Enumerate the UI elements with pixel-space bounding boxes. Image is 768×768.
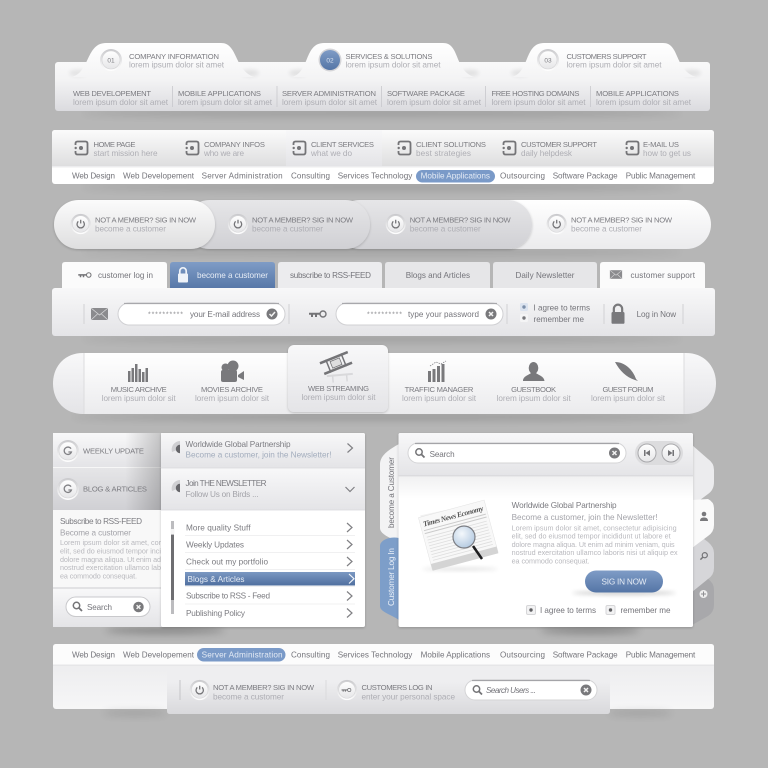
text block: subscribe: Become a customer: [60, 529, 131, 538]
customers log in: [337, 680, 455, 702]
item: movies archive: [195, 360, 270, 403]
item: traffic manager: [402, 361, 477, 403]
text block: newsletter: Worldwide Global Partnership: [512, 501, 617, 510]
icon: equalizer bars: [128, 364, 148, 382]
nav bar links: Web Developement: [123, 650, 195, 660]
email input: [118, 303, 285, 325]
tab: customer support: customer support: [630, 271, 696, 280]
text block: subscribe: dolore magna aliqua. Ut enim ad: [60, 555, 161, 564]
item: music archive: MUSIC ARCHIVE: [111, 385, 167, 394]
text block: newsletter: dolore magna aliqua. Ut enim ad minim veniam, quis: [512, 540, 675, 549]
sub menu columns: lorem ipsum dolor sit amet: [178, 98, 273, 107]
segment 2: [228, 214, 354, 234]
password input: type your password: [408, 310, 479, 319]
icon: person: [523, 362, 544, 381]
checkboxes: [520, 303, 590, 324]
customers log in: enter your personal space: [362, 692, 455, 702]
item: worldwide partnership: [172, 440, 352, 460]
previous and next buttons: [635, 441, 683, 465]
nav bar links: Web Developement: [123, 172, 195, 180]
illustration: newspaper with magnifier: [418, 498, 499, 571]
panel: newsletter sign-in card: [380, 433, 714, 634]
tab: customers support: 03: [544, 58, 552, 64]
search users field: [465, 680, 597, 700]
list of links: Publishing Policy: [186, 609, 246, 618]
icon: rising chart: [428, 364, 444, 382]
tab: blogs and articles: Blogs and Articles: [406, 271, 470, 280]
side tab: customer log in: Customer Log In: [387, 548, 396, 606]
nav bar links: [72, 648, 696, 662]
text block: newsletter: elit, sed do eiusmod tempor incididunt ut labore et: [512, 532, 671, 541]
panel: numbered tab navigation: [55, 43, 710, 117]
password input: [336, 303, 503, 325]
sign in prompt: NOT A MEMBER? SIG IN NOW: [213, 683, 315, 692]
customers log in: CUSTOMERS LOG IN: [362, 683, 432, 692]
tab: company information: COMPANY INFORMATION: [129, 52, 219, 61]
sub menu columns: SOFTWARE PACKAGE: [387, 89, 465, 98]
menu item: home page: HOME PAGE: [94, 140, 136, 149]
menu item: company infos: who we are: [203, 149, 244, 158]
tab: services and solutions: lorem ipsum dolor sit amet: [346, 60, 441, 70]
checkboxes: I agree to terms: [534, 304, 590, 312]
sub menu columns: WEB DEVELOPEMENT: [73, 89, 151, 98]
checkboxes: I agree to terms: [540, 606, 596, 615]
tab: services and solutions: 02: [326, 58, 334, 64]
text block: newsletter: ea commodo consequat.: [512, 556, 590, 566]
tab: company information: [72, 43, 254, 77]
item: worldwide partnership: Become a customer, join the Newsletter!: [186, 450, 332, 460]
menu item: company infos: COMPANY INFOS: [204, 140, 265, 149]
menu item: home page: start mission here: [94, 149, 158, 158]
nav bar links: Software Package: [553, 650, 618, 660]
sub menu columns: FREE HOSTING DOMAINS: [492, 89, 580, 98]
item: join newsletter: Follow Us on Birds ...: [186, 490, 258, 499]
tab: subscribe to RSS-FEED: subscribe to RSS-FEED: [290, 271, 371, 280]
item: web streaming: lorem ipsum dolor sit: [302, 393, 376, 402]
item: guestbook: [497, 362, 571, 403]
list of links: Subscribe to RSS - Feed: [186, 592, 270, 600]
segment 4: [547, 214, 673, 234]
tab: daily newsletter: [493, 262, 597, 290]
search field: Search: [87, 603, 112, 612]
item: traffic manager: TRAFFIC MANAGER: [405, 385, 474, 394]
item: music archive: [102, 364, 176, 403]
nav bar links: Server Administration: [202, 650, 283, 660]
list of links: [185, 523, 355, 618]
button: sign in now: SIG IN NOW: [602, 578, 647, 586]
nav bar links: Web Design: [72, 650, 115, 660]
sub menu columns: MOBILE APPLICATIONS: [596, 89, 679, 98]
sub menu columns: lorem ipsum dolor sit amet: [73, 98, 169, 107]
item: movies archive: lorem ipsum dolor sit: [195, 394, 270, 403]
list of links: More quality Stuff: [186, 524, 251, 532]
menu item: company infos: [186, 140, 265, 158]
tab: customer log in: customer log in: [98, 271, 153, 280]
item: join newsletter: [172, 479, 354, 499]
tab: customer support: [600, 262, 705, 290]
tab: subscribe to RSS-FEED: [278, 262, 382, 290]
segment 3: NOT A MEMBER? SIG IN NOW: [410, 216, 512, 225]
nav bar links: Consulting: [291, 172, 330, 180]
nav bar links: Services Technology: [338, 172, 413, 180]
menu item: e-mail us: how to get us: [643, 149, 691, 158]
icon: plus: [700, 590, 708, 598]
log in now: Log in Now: [637, 310, 676, 319]
segment 4: NOT A MEMBER? SIG IN NOW: [571, 216, 673, 225]
menu item: client services: CLIENT SERVICES: [311, 140, 374, 149]
nav bar links: Mobile Applications: [421, 172, 490, 180]
tab: company information: lorem ipsum dolor sit amet: [129, 60, 225, 70]
segment 3: become a customer: [410, 224, 481, 234]
scrollbar: [170, 521, 174, 614]
segment 1: NOT A MEMBER? SIG IN NOW: [95, 216, 197, 225]
item: guest forum: lorem ipsum dolor sit: [591, 394, 666, 403]
nav bar links: Public Management: [626, 172, 696, 180]
list of links: Check out my portfolio: [186, 558, 268, 566]
password input: **********: [367, 312, 402, 318]
sub menu columns: MOBILE APPLICATIONS: [178, 89, 261, 98]
item: web streaming: WEB STREAMING: [308, 384, 369, 393]
list of links: Weekly Updates: [186, 540, 244, 550]
search field: [408, 443, 626, 463]
panel: segmented pill sign-in bar: [54, 200, 711, 255]
text block: newsletter: nostrud exercitation ullamco laboris nisi ut aliquip ex: [512, 548, 678, 557]
text block: subscribe: nostrud exercitation ullamco lab: [60, 563, 161, 572]
tab: become a customer: become a customer: [197, 271, 268, 280]
panel: footer navigation: [53, 644, 714, 716]
nav bar links: [72, 170, 696, 182]
item: guestbook: lorem ipsum dolor sit: [497, 394, 571, 403]
text block: subscribe: ea commodo consequat.: [60, 572, 137, 580]
item: blog and articles: [57, 478, 147, 500]
search field: Search: [430, 450, 455, 459]
panel: accordion sidebar: [53, 433, 365, 634]
left accordion column: [53, 433, 163, 627]
icon: user: [700, 512, 708, 521]
menu item: e-mail us: E-MAIL US: [643, 140, 679, 149]
checkboxes: [526, 606, 671, 615]
sub menu columns: lorem ipsum dolor sit amet: [282, 98, 378, 107]
side tabs right: [692, 445, 714, 625]
menu item: e-mail us: [626, 140, 691, 158]
sign in prompt: become a customer: [213, 692, 284, 702]
nav bar links: Software Package: [553, 172, 618, 180]
text block: subscribe: Subscribe to RSS-FEED: [60, 517, 142, 526]
sub menu columns: lorem ipsum dolor sit amet: [492, 98, 586, 107]
side tab: become a customer: become a Customer: [387, 457, 396, 528]
menu item: customer support: daily helpdesk: [521, 149, 573, 158]
nav bar links: Server Administration: [202, 172, 283, 180]
item: movies archive: MOVIES ARCHIVE: [201, 385, 263, 394]
segment 4: become a customer: [571, 224, 642, 234]
item: guest forum: [591, 362, 666, 403]
item: traffic manager: lorem ipsum dolor sit: [402, 394, 477, 403]
tab: blogs and articles: [385, 262, 490, 290]
tab: services and solutions: [292, 43, 474, 77]
nav bar links: Mobile Applications: [421, 650, 490, 660]
text block: newsletter: [512, 501, 678, 566]
panel: login form with tabs: [52, 262, 715, 342]
item: music archive: lorem ipsum dolor sit: [102, 394, 176, 403]
nav bar links: Outsourcing: [500, 172, 545, 180]
search users field: Search Users ...: [486, 686, 536, 695]
button: sign in now: [572, 570, 676, 595]
menu item: client services: what we do: [310, 149, 352, 158]
side tab: become a customer: [380, 444, 399, 542]
text block: subscribe: [60, 517, 162, 580]
checkboxes: remember me: [620, 606, 671, 615]
text block: subscribe: elit, sed do eiusmod tempor inci: [60, 546, 161, 556]
segment 2: NOT A MEMBER? SIG IN NOW: [252, 216, 354, 225]
email input: **********: [148, 312, 183, 318]
icon: movie camera: [221, 360, 244, 382]
icon: feather: [615, 362, 638, 381]
right accordion column: [161, 433, 365, 627]
panel: icon menu with nav bar: [52, 130, 714, 191]
segment 3: [386, 214, 512, 234]
tab: customers support: [512, 43, 696, 77]
icon: film strip: [319, 351, 353, 375]
log in now: [612, 305, 676, 324]
item: weekly update: [57, 440, 144, 462]
menu item: client solutions: CLIENT SOLUTIONS: [416, 140, 486, 149]
sub menu columns: lorem ipsum dolor sit amet: [387, 98, 482, 107]
text block: newsletter: Lorem ipsum dolor sit amet, consectetur adipisicing: [512, 524, 677, 532]
tab: customers support: lorem ipsum dolor sit amet: [566, 60, 662, 70]
search field: [66, 597, 150, 616]
side tab: customer log in: [380, 537, 399, 620]
sign in prompt: [190, 680, 315, 702]
list of links: Blogs & Articles: [188, 575, 244, 584]
key icon: [309, 311, 326, 317]
illustration: newspaper with magnifier: Times News Economy: [422, 504, 485, 529]
tab: customer log in: [62, 262, 167, 290]
item: weekly update: WEEKLY UPDATE: [83, 446, 144, 456]
segment 2: become a customer: [252, 224, 323, 234]
nav bar links: Services Technology: [338, 650, 413, 660]
tab: services and solutions: SERVICES & SOLUTIONS: [346, 52, 432, 61]
segment 1: [71, 214, 197, 234]
menu item: customer support: [502, 140, 597, 158]
item: guest forum: GUEST FORUM: [602, 385, 654, 394]
nav bar links: Web Design: [72, 172, 115, 180]
menu item: home page: [74, 140, 158, 158]
panel: icon archive bar: [53, 345, 716, 420]
menu item: client solutions: [398, 140, 486, 158]
checkboxes: remember me: [534, 315, 584, 324]
item: join newsletter: Join THE NEWSLETTER: [186, 479, 267, 488]
text block: newsletter: Become a customer, join the Newsletter!: [512, 513, 658, 522]
item: guestbook: GUESTBOOK: [511, 385, 556, 394]
icon: search: [700, 553, 707, 560]
tab: company information: 01: [107, 58, 115, 64]
nav bar links: Public Management: [626, 650, 696, 660]
item: web streaming: [288, 345, 388, 412]
text block: subscribe: Lorem ipsum dolor sit amet, cor: [60, 538, 162, 547]
email icon: [91, 308, 108, 320]
menu item: client solutions: best strategies: [416, 149, 471, 158]
email input: your E-mail address: [190, 310, 260, 319]
menu item: customer support: CUSTOMER SUPPORT: [521, 140, 597, 149]
item: blog and articles: BLOG & ARTICLES: [83, 484, 147, 494]
segment 1: become a customer: [95, 224, 166, 234]
sub menu columns: [73, 86, 692, 107]
tab: daily newsletter: Daily Newsletter: [516, 271, 575, 280]
sub menu columns: lorem ipsum dolor sit amet: [596, 98, 692, 107]
nav bar links: Consulting: [291, 650, 330, 660]
tab: become a customer: [170, 262, 275, 290]
menu item: client services: [292, 140, 374, 158]
drop-down login strip: [167, 668, 610, 714]
item: worldwide partnership: Worldwide Global Partnership: [186, 440, 291, 449]
tab: customers support: CUSTOMERS SUPPORT: [566, 52, 647, 61]
sub menu columns: SERVER ADMINISTRATION: [282, 89, 376, 98]
nav bar links: Outsourcing: [500, 650, 545, 660]
